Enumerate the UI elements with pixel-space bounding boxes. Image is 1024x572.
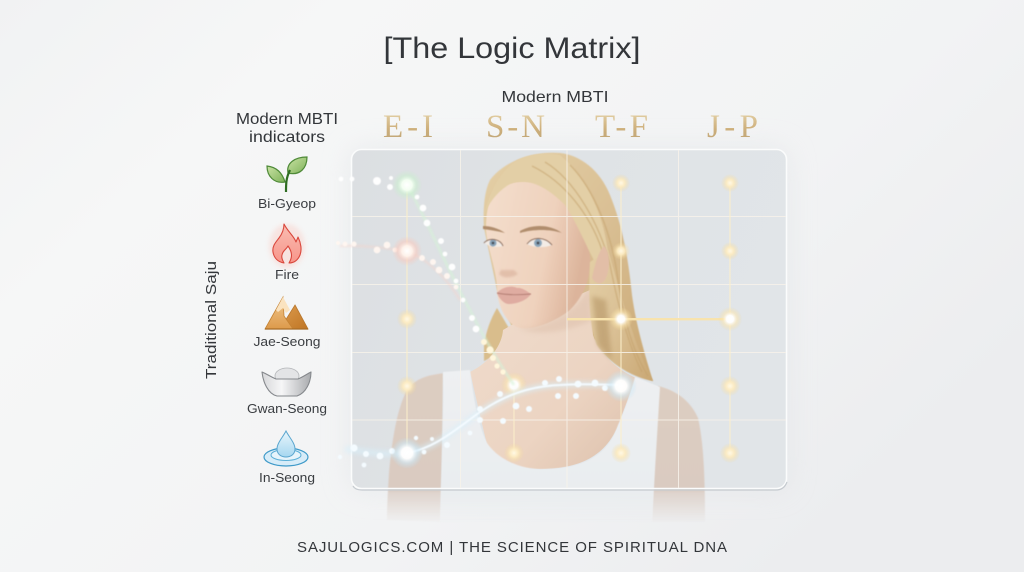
curve: Bi-Gyeop green path [339, 170, 514, 385]
neck and chest [470, 290, 636, 469]
face [486, 182, 590, 328]
label: In-Seong: In-Seong [259, 470, 315, 485]
column headers: MBTI pairs: J-P [707, 109, 758, 145]
lip line [497, 293, 531, 295]
label: Jae-Seong: Jae-Seong [254, 334, 320, 349]
icon: water drop [264, 431, 308, 466]
panel: logic matrix [351, 149, 787, 522]
label: Gwan-Seong: Gwan-Seong [247, 401, 327, 416]
title: [The Logic Matrix] [384, 32, 640, 65]
right arm [652, 386, 705, 522]
node connector lines [407, 183, 730, 453]
icon: silver ingot [262, 368, 311, 396]
row axis label: Traditional Saju [203, 261, 220, 379]
hair lower left [484, 308, 508, 362]
icon: flame [269, 224, 305, 268]
left arm [387, 373, 445, 522]
curve: In-Seong blue stream [338, 370, 637, 469]
column headers: MBTI pairs: T-F [595, 109, 648, 145]
row group heading [236, 111, 338, 146]
icon: sprout [267, 157, 307, 192]
label: Fire: Fire [275, 267, 299, 282]
panel bottom edge shadow [353, 482, 787, 490]
icon: mountains [265, 297, 308, 329]
label: Bi-Gyeop: Bi-Gyeop [258, 196, 316, 211]
row group heading: Modern MBTI [236, 111, 338, 128]
row group heading: indicators [249, 129, 325, 146]
hair falling in front of neck [589, 250, 653, 381]
right eye [527, 238, 552, 247]
nose shadow [499, 270, 518, 277]
hair shadow [592, 296, 612, 360]
hair strands [532, 162, 640, 363]
lips [497, 287, 531, 304]
facial features [483, 226, 562, 304]
column headers: MBTI pairs [383, 109, 758, 145]
connection: T-F to J-P gold [567, 318, 730, 320]
left brow [483, 226, 505, 233]
grid lines [352, 150, 786, 488]
right brow [520, 226, 562, 233]
column axis heading: Modern MBTI [502, 89, 608, 106]
ear [592, 246, 609, 283]
tank top [440, 370, 660, 522]
left eye [484, 239, 503, 247]
footer: SAJULOGICS.COM | THE SCIENCE OF SPIRITUAL DNA [297, 539, 727, 556]
hair back [484, 153, 653, 381]
hair crown strand [484, 154, 608, 262]
under-chin shadow [529, 291, 590, 332]
portrait of woman [387, 153, 705, 522]
nodes: gold [397, 174, 742, 463]
column headers: MBTI pairs: E-I [383, 109, 433, 145]
curve: Fire red path [336, 236, 460, 300]
column headers: MBTI pairs: S-N [486, 109, 545, 145]
panel border [352, 150, 786, 488]
